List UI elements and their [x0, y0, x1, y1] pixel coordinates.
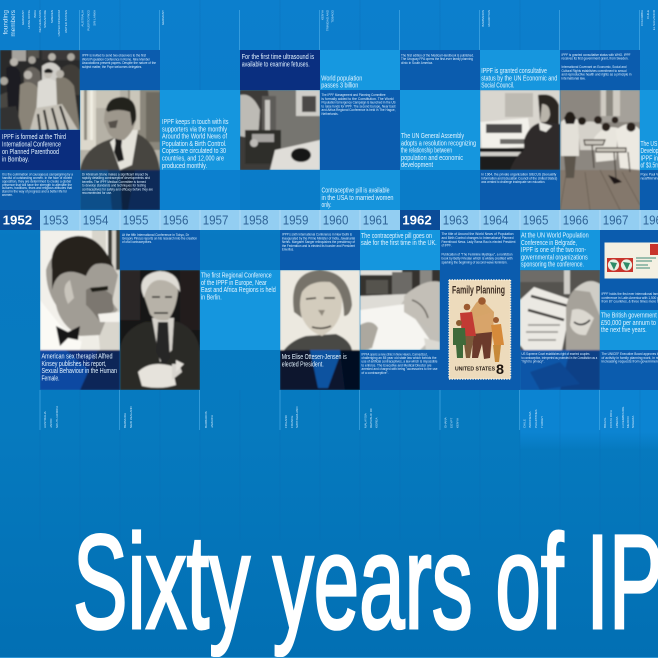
- panel: 1967 Latin America conference and card: [600, 230, 658, 310]
- panel: Belgrade conference: At the UN World Population: [521, 230, 589, 240]
- label: member countries top row: SRI LANKA: [92, 10, 96, 26]
- panel: 1956 Around the World News: supporters via the monthly: [162, 124, 227, 133]
- text block: New Haven clinic: IPPFA opens a new clinic in New Haven, Connecticut,: [362, 352, 428, 356]
- panel: World population passes 3 billion: World population: [321, 73, 362, 82]
- label: member countries bottom row: SWITZERLAND: [295, 406, 299, 428]
- label: member countries bottom row: TURKEY: [540, 416, 544, 428]
- text block: WHO and International Covenant: [560, 50, 640, 90]
- label: member countries top row: GERMANY: [161, 10, 165, 25]
- label: member countries bottom row: [43, 405, 635, 428]
- text block: 1954 first World Population Conference: subject matter, the Pope welcomes delegates.: [82, 65, 142, 69]
- panel: Belgrade conference: sponsoring the conference.: [521, 260, 584, 269]
- label: founding members: UNITED KINGDOM: [57, 10, 61, 36]
- panel: UN General Assembly: adopts a resolution recognizing: [401, 138, 476, 147]
- text block: New Haven clinic: [360, 350, 440, 390]
- text block: 1960 Management and Planning Committee: and Africa Regional Conference is held in The Hague,: [322, 108, 396, 112]
- timeline strip: years: 1964: [483, 212, 508, 227]
- panel: lighter bottom-right band: [520, 390, 658, 450]
- year: 1952 highlighted: [0, 210, 40, 230]
- photo: Alfred Kinsey with caption: American sex therapist Alfred: [42, 352, 112, 360]
- label: member countries bottom row: MEXICO: [626, 415, 630, 428]
- photo: Dr Abraham Stone with caption: [80, 90, 160, 210]
- photo: student nurses in classroom: [560, 90, 640, 210]
- panel: consultative status: status by the UN Economic and: [481, 73, 557, 82]
- photo: Dr Abraham Stone with caption: recommended for use.: [82, 191, 112, 195]
- label: founding members: NETHERLANDS: [38, 10, 42, 32]
- label: founding members: HONG KONG: [27, 9, 31, 29]
- panel: UN General Assembly: [400, 90, 480, 170]
- label: member countries top row: [80, 9, 656, 31]
- panel: British government grant: [600, 310, 658, 350]
- label: member countries bottom row: NEW ZEALAND: [129, 405, 133, 428]
- panel: 1963 Feminine Mystique and stamp: Publication of "The Feminine Mystique", a nonfiction: [442, 253, 513, 257]
- text block: New Haven clinic: use of artificial contraceptives, a law which is impossible: [362, 360, 438, 364]
- text block: WHO and International Covenant: receives its first government grant, from Sweden.: [562, 57, 629, 61]
- text block: New Haven clinic: arrested and charged with being "accessories to the use: [362, 367, 438, 371]
- text block: culmination of campaigning: stand in the way of progress and a better life for: [2, 190, 68, 194]
- panel: UN General Assembly: population and economic: [401, 153, 463, 162]
- label: founding members: members: [10, 10, 17, 37]
- text block: New Delhi conference: Emeritus.: [282, 248, 294, 252]
- timeline strip: years: 1956: [163, 212, 188, 227]
- panel: 1963 Feminine Mystique and stamp: of IPPF.: [442, 244, 452, 248]
- panel: Belgrade conference: [520, 230, 600, 270]
- icon: Family Planning postage stamp: 8: [496, 361, 504, 377]
- icon: Family Planning postage stamp: Family Planning: [452, 284, 505, 296]
- label: member countries bottom row: AUSTRALIA: [43, 411, 47, 428]
- text block: 1960 Management and Planning Committee: Netherlands.: [322, 112, 339, 116]
- text block: SIECUS: Information and Education Council of the United States): [481, 176, 557, 180]
- panel: pill in UK: The contraceptive pill goes on: [361, 231, 432, 240]
- text block: New Delhi conference: [280, 230, 360, 270]
- label: founding members: UNITED STATES: [64, 10, 68, 33]
- text block: New Haven clinic: challenging an 85 year old state law which forbids the: [362, 356, 437, 360]
- photo: Alfred Kinsey with caption: Sexual Behaviour in the Human: [42, 366, 117, 375]
- text block: UNICEF Executive Board: increasing requests from governments.: [602, 360, 658, 364]
- text block: SIECUS: was created to challenge inadequate sex education.: [481, 180, 545, 184]
- text block: WHO and International Covenant: International Covenant on Economic, Social and: [562, 65, 627, 69]
- label: member countries bottom row: EGYPT: [450, 418, 454, 428]
- icon: Family Planning postage stamp: [449, 280, 510, 379]
- timeline strip: years: 1955: [123, 212, 148, 227]
- label: member countries bottom row: SOUTH AFRICA: [55, 406, 59, 428]
- text block: Gregory Pincus: Gregory Pincus reports on his research into the creation: [122, 237, 197, 241]
- photo: Mrs Elise Ottesen-Jensen with caption: [280, 270, 360, 390]
- text block: culmination of campaigning: opposition, they are determined to create a global: [2, 179, 71, 183]
- panel: first Regional Conference Berlin: of the IPPF in Europe, Near: [201, 278, 267, 287]
- label: member countries bottom row: PHILIPPINES: [534, 409, 538, 428]
- panel: first Regional Conference Berlin: [200, 270, 280, 350]
- text block: culmination of campaigning: cultures, traditions, fears and religious attitudes that: [2, 186, 72, 190]
- text block: 1954 first World Population Conference: Associations present papers. Despite the nature of the: [82, 61, 156, 65]
- label: founding members: founding: [2, 10, 10, 35]
- photo: woman with family planning sign: [480, 90, 560, 170]
- panel: UN General Assembly: development: [401, 160, 433, 169]
- label: member countries bottom row: JAPAN: [49, 419, 53, 428]
- text block: 1960 Management and Planning Committee: The IPPF Management and Planning Committee: [322, 93, 386, 97]
- text block: 1954 first World Population Conference: World Population Conference in Rome. Nine Member: [82, 57, 151, 61]
- panel: 1952 founding of IPPF: [0, 50, 80, 210]
- label: member countries bottom row: FINLAND: [284, 414, 288, 428]
- text block: SIECUS: In 1964, the private organization SIECUS (Sexuality: [481, 172, 557, 176]
- label: member countries bottom row: COSTA RICA: [609, 410, 613, 428]
- photo: Dr Abraham Stone with caption: benefits. The IPPF Medical Committee is formed: [82, 180, 146, 184]
- panel: 1956 Around the World News: [160, 90, 240, 210]
- heading block: IPPF is formed: on Planned Parenthood: [2, 147, 59, 156]
- heading block: IPPF is formed: International Conference: [2, 140, 61, 148]
- panel: UN General Assembly: The UN General Assembly: [401, 131, 464, 140]
- timeline strip: years: 1963: [443, 212, 468, 227]
- panel: World population passes 3 billion: [320, 50, 400, 90]
- year: 1962 highlighted: 1962: [402, 212, 432, 227]
- text block: culmination of campaigning: women.: [2, 193, 13, 197]
- timeline strip: years: 1966: [563, 212, 588, 227]
- panel: World population passes 3 billion: passes 3 billion: [321, 81, 358, 90]
- label: founding members: [2, 9, 68, 37]
- label: member countries top row: TOBAGO: [330, 9, 334, 23]
- text block: WHO and International Covenant: Cultural Rights establishes commitment to sexual: [562, 69, 627, 73]
- label: member countries top row: KENYA: [320, 10, 324, 20]
- label: member countries bottom row: BARBADOS: [204, 411, 208, 428]
- text block: 1960 Management and Planning Committee: is formally added to the Constitution. The World: [322, 97, 394, 101]
- label: founding members: SWEDEN: [50, 10, 54, 23]
- text block: Medical Handbook: The Uruguay FPA opens the first-ever family planning: [401, 57, 473, 61]
- text block: WHO and International Covenant: international law.: [562, 76, 586, 80]
- label: member countries top row: TRINIDAD AND: [326, 9, 330, 31]
- panel: contraceptive pill USA: [320, 170, 400, 210]
- icon: Family Planning postage stamp: UNITED STATES: [455, 367, 496, 373]
- panel: 1963 Feminine Mystique and stamp: The title of Around the World News of Population: [442, 232, 514, 236]
- label: member countries bottom row: MALAYSIA: [364, 413, 368, 428]
- label: member countries top row: EL SALVADOR: [652, 9, 656, 30]
- text block: 1960 Management and Planning Committee: Population Emergency Campaign is launched in the US: [322, 101, 396, 105]
- label: member countries bottom row: LIBERIA: [615, 416, 619, 428]
- label: member countries top row: BARBADOS: [481, 10, 485, 27]
- panel: 1956 Around the World News: Copies are circulated to 30: [162, 146, 226, 155]
- panel: 1963 Feminine Mystique and stamp: [440, 230, 520, 390]
- text block: culmination of campaigning: It is the culmination of courageous campaigning by a: [2, 172, 73, 176]
- label: member countries bottom row: CHILE: [522, 419, 526, 428]
- photo: seated man with white hair: [120, 270, 200, 390]
- panel: USAID grant (cropped): [640, 90, 658, 210]
- timeline strip: years: 1958: [243, 212, 268, 227]
- timeline strip: years: 1965: [523, 212, 548, 227]
- label: member countries bottom row: KENYA: [456, 418, 460, 428]
- text block: Medical Handbook: The first edition of the Medical Handbook is published.: [401, 54, 474, 58]
- label: founding members: GERMANY: [21, 10, 25, 25]
- timeline strip: years: 1960: [323, 212, 348, 227]
- photo: Alfred Kinsey with caption: Female.: [42, 374, 60, 382]
- text block: WHO and International Covenant: and reproductive health and rights as a principle in: [562, 73, 632, 77]
- text block: 1960 Management and Planning Committee: to raise funds for IPPF. The second Europe, Near East: [322, 104, 396, 108]
- label: member countries bottom row: REPUBLIC OF: [369, 408, 373, 428]
- panel: Belgrade conference: IPPF is one of the two non-: [521, 245, 586, 254]
- panel: 1956 Around the World News: Around the World News of: [162, 132, 228, 141]
- photo: hands with pills: [360, 270, 440, 350]
- text block: culmination of campaigning: [0, 170, 80, 210]
- text block: New Delhi conference: inaugurated by the Prime Minister of India, Jawaharlal: [282, 236, 355, 240]
- panel: pill in UK: [360, 230, 440, 270]
- year: 1962 highlighted: [400, 210, 440, 230]
- panel: contraceptive pill USA: Contraceptive pill is available: [322, 186, 390, 194]
- text block: 1960 Management and Planning Committee: [320, 90, 400, 170]
- panel: first Regional Conference Berlin: East and Africa Regions is held: [201, 285, 276, 294]
- panel: 1956 Around the World News: produced monthly.: [162, 161, 207, 170]
- panel: Belgrade conference: Conference in Belgrade,: [521, 238, 577, 247]
- text block: Medical Handbook: [400, 50, 480, 90]
- panel: 1963 Feminine Mystique and stamp: book by Betty Friedan which is widely credited with: [442, 256, 513, 260]
- photo: ultrasound machine: [240, 90, 320, 170]
- panel: pill in UK: sale for the first time in the UK.: [361, 238, 437, 247]
- label: member countries top row: COLOMBIA: [640, 10, 644, 26]
- label: member countries bottom row: GHANA: [444, 417, 448, 428]
- heading block: ultrasound: available to examine fetuses.: [242, 59, 310, 68]
- text block: Medical Handbook: clinic in South America.: [401, 61, 433, 65]
- label: member countries top row: MAURITIUS: [487, 10, 491, 26]
- text block: culmination of campaigning: presence that will have the strength to alleviate the: [2, 183, 72, 187]
- text block: 1954 first World Population Conference: IPPF is invited to send two observers to the first: [82, 54, 146, 58]
- label: founding members: INDIA: [33, 10, 37, 18]
- timeline strip: years: [0, 210, 658, 230]
- label: member countries bottom row: KOREA: [374, 417, 378, 428]
- photo: Dr Abraham Stone with caption: contraceptives for safety and efficacy before they are: [82, 187, 153, 191]
- panel: 1963 Feminine Mystique and stamp: and Birth Control changes to International Planned: [442, 236, 514, 240]
- photo: woman holding newspaper with caption: US Supreme Court establishes right of married couples: [522, 352, 590, 356]
- panel: first Regional Conference Berlin: The first Regional Conference: [201, 270, 272, 280]
- text block: New Haven clinic: to enforce. The Executive and Medical Director are: [362, 363, 432, 367]
- label: member countries bottom row: FRANCE: [290, 416, 294, 428]
- panel: 1963 Feminine Mystique and stamp: Parenthood News. Lady Rama Rau is elected President: [442, 240, 516, 244]
- timeline strip: years: 1959: [283, 212, 308, 227]
- panel: 1956 Around the World News: Population & Birth Control.: [162, 139, 226, 148]
- photo: Dr Abraham Stone with caption: rapidly detailing contraceptive developments and: [82, 176, 150, 180]
- label: member countries bottom row: BERMUDA: [123, 413, 127, 428]
- label: founding members: SINGAPORE: [43, 10, 47, 28]
- photo: Mrs Elise Ottesen-Jensen with caption: Mrs Elise Ottesen-Jensen is: [282, 352, 347, 361]
- heading block: ultrasound: For the first time ultrasound is: [242, 52, 314, 61]
- label: member countries bottom row: NIGERIA: [631, 416, 635, 428]
- panel: 1963 Feminine Mystique and stamp: sparking the beginning of second-wave feminism.: [442, 260, 508, 264]
- panel: 1956 Around the World News: countries, and 12,000 are: [162, 154, 224, 162]
- panel: consultative status: IPPF is granted consultative: [481, 66, 547, 75]
- text block: WHO and International Covenant: IPPF is granted consultative status with WHO. IPPF: [562, 53, 631, 57]
- text block: New Haven clinic: of a contraceptive".: [362, 371, 389, 375]
- heading block: IPPF is formed: in Bombay.: [2, 154, 29, 164]
- panel: 1956 Around the World News: IPPF keeps in touch with its: [162, 117, 229, 126]
- heading block: ultrasound: [240, 50, 320, 90]
- text block: New Delhi conference: Nehru. Margaret Sanger relinquishes the presidency of: [282, 240, 355, 244]
- year: 1952 highlighted: 1952: [3, 212, 32, 227]
- photo: woman holding newspaper with caption: "right to privacy".: [522, 360, 545, 364]
- timeline strip: years: 1953: [43, 212, 68, 227]
- heading block: IPPF is formed: IPPF is formed at the Third: [2, 132, 66, 141]
- photo: Alfred Kinsey with caption: [40, 230, 120, 390]
- photo: founders group: [0, 50, 80, 130]
- icon: commemorative cover: [604, 242, 658, 278]
- panel: Belgrade conference: governmental organizations: [521, 252, 588, 261]
- label: member countries bottom row: JAMAICA: [210, 415, 214, 428]
- panel: contraceptive pill USA: only.: [322, 200, 332, 209]
- text block: Gregory Pincus: of oral contraceptives.: [122, 240, 152, 244]
- timeline strip: years: 1954: [83, 212, 108, 227]
- panel: UN General Assembly: the relationship between: [401, 146, 452, 155]
- text block: Gregory Pincus: At the fifth International Conference in Tokyo, Dr: [122, 233, 190, 237]
- panel: consultative status: Social Council.: [481, 81, 514, 90]
- photo: woman holding newspaper with caption: to contraception, interpreted as protected in the Constitution as a: [522, 356, 597, 360]
- label: member countries top row: CHILE: [646, 10, 650, 19]
- label: member countries top row: AUSTRALIA: [80, 10, 84, 27]
- text block: culmination of campaigning: handful of outstanding women. In the face of violent: [2, 176, 72, 180]
- text block: UNICEF Executive Board: [600, 350, 658, 390]
- heading block: IPPF is formed: [0, 130, 80, 170]
- text block: New Delhi conference: IPPF's sixth International Conference in New Delhi is: [282, 232, 352, 236]
- text block: 1954 first World Population Conference: [80, 50, 160, 90]
- panel: contraceptive pill USA: in the USA to married women: [322, 193, 394, 202]
- photo: Dr Abraham Stone with caption: to develop standards and techniques for testing: [82, 184, 146, 188]
- photo: Alfred Kinsey with caption: Kinsey publishes his report,: [42, 359, 106, 368]
- timeline strip: years: 1961: [363, 212, 388, 227]
- text block: Gregory Pincus: [120, 230, 200, 270]
- text block: New Delhi conference: the Federation and is elected its founder and President: [282, 244, 355, 248]
- photo: woman holding newspaper with caption: [520, 270, 600, 390]
- label: member countries bottom row: BRAZIL: [603, 417, 607, 428]
- panel: first Regional Conference Berlin: in Berlin.: [201, 292, 222, 301]
- timeline strip: years: 1957: [203, 212, 228, 227]
- text block: SIECUS: [480, 170, 560, 210]
- photo: Mrs Elise Ottesen-Jensen with caption: elected President.: [282, 359, 324, 368]
- label: member countries bottom row: INDONESIA: [528, 411, 532, 428]
- label: member countries bottom row: LUXEMBOURG: [621, 406, 625, 428]
- panel: consultative status: [480, 50, 560, 90]
- label: member countries top row: PUERTO RICO: [86, 9, 90, 31]
- timeline strip: years: 1967: [603, 212, 628, 227]
- photo: Dr Abraham Stone with caption: Dr Abraham Stone makes a significant impact by: [82, 172, 148, 176]
